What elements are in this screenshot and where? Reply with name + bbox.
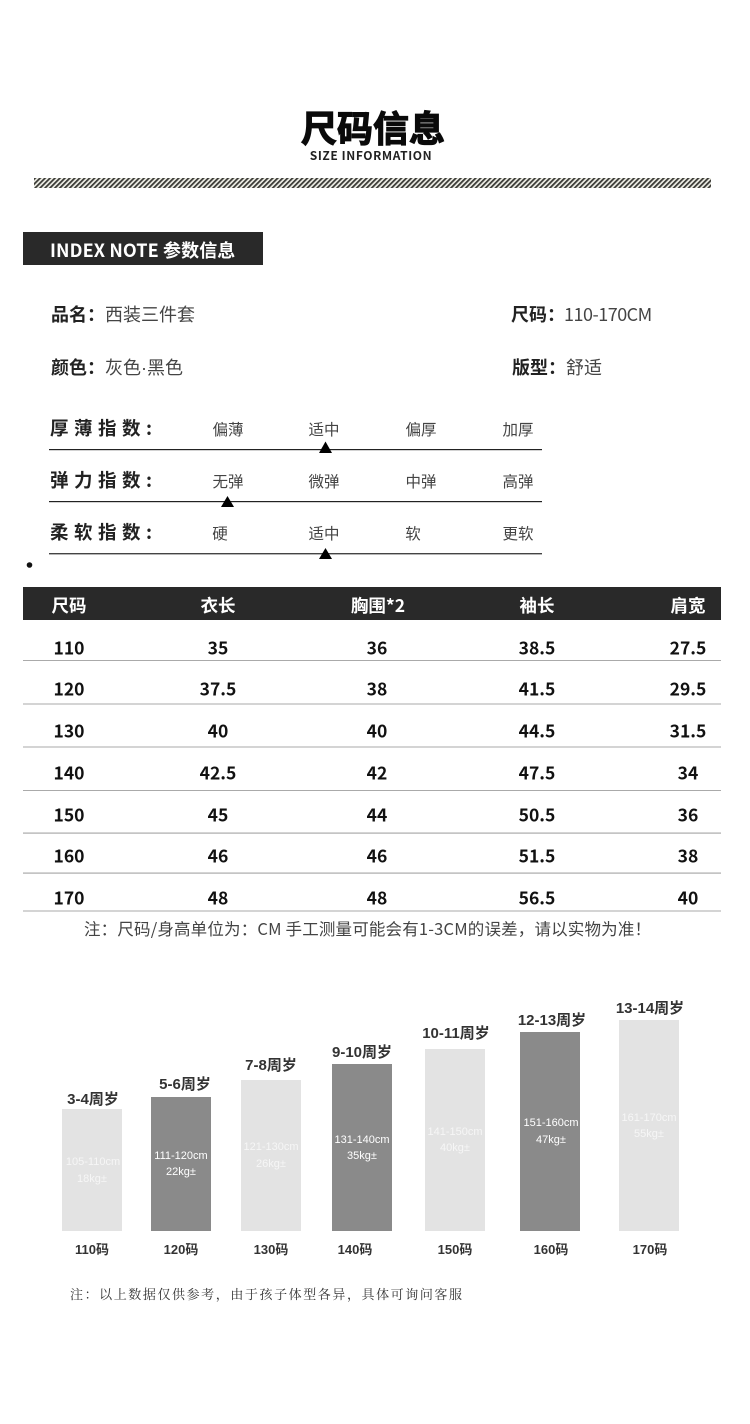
table header: 袖长 — [520, 593, 555, 618]
table header: 衣长 — [200, 593, 236, 618]
title: 尺码信息 — [301, 100, 445, 152]
row 130 — [54, 718, 706, 744]
panel: elasticity index: 高弹 — [502, 470, 534, 492]
bar 110: 110码 — [75, 1242, 109, 1257]
icon: thickness marker — [319, 442, 332, 453]
row 110: 110 — [54, 636, 84, 660]
row 160: 46 — [367, 844, 387, 868]
row 110: 35 — [208, 636, 228, 660]
bar 110: 105-110cm — [66, 1156, 120, 1168]
table header: 尺码 — [52, 593, 86, 618]
chart: age and height bars — [62, 999, 684, 1257]
bar 120: 120码 — [164, 1242, 198, 1257]
icon: elasticity marker — [221, 496, 234, 507]
row 130: 40 — [208, 718, 228, 744]
row 170: 48 — [208, 886, 228, 910]
panel: elasticity index: 中弹 — [405, 470, 437, 492]
panel: softness index: 更软 — [502, 522, 534, 544]
bar 150: 10-11周岁 — [422, 1024, 490, 1042]
text: size range: 110-170CM — [564, 301, 652, 327]
row 170: 40 — [678, 886, 698, 910]
bar 130 — [241, 1056, 301, 1257]
row 160: 160 — [54, 844, 84, 868]
text: product name: 品名： — [51, 301, 105, 327]
bar 170: 161-170cm — [621, 1112, 677, 1124]
text: size range — [511, 301, 652, 327]
row 160 — [54, 844, 698, 868]
table: size chart — [23, 587, 721, 912]
bar 160: 151-160cm — [523, 1117, 579, 1129]
row 120: 41.5 — [519, 676, 555, 702]
row 170: 56.5 — [519, 886, 555, 910]
bar 160: 12-13周岁 — [518, 1011, 586, 1029]
panel: thickness index: 厚薄指数: — [50, 415, 158, 441]
panel: softness index: 柔软指数: — [50, 519, 158, 545]
chart note: 注：以上数据仅供参考，由于孩子体型各异，具体可询问客服 — [70, 1284, 462, 1303]
bar 120 — [151, 1075, 211, 1257]
text: fit: 舒适 — [566, 354, 602, 380]
row 140: 42 — [367, 760, 387, 786]
row 130: 31.5 — [670, 718, 706, 744]
row 150: 36 — [678, 802, 698, 828]
row 150 — [54, 802, 698, 828]
row 120: 29.5 — [670, 676, 706, 702]
text: product name: 西装三件套 — [105, 301, 195, 327]
panel: product info — [51, 301, 652, 380]
text: size range: 尺码： — [511, 301, 565, 327]
table header: 肩宽 — [670, 593, 706, 618]
row 150: 44 — [367, 802, 387, 828]
bar 130: 26kg± — [256, 1158, 286, 1170]
bar 160: 47kg± — [536, 1134, 566, 1146]
row 110: 27.5 — [670, 636, 706, 660]
row 160: 38 — [678, 844, 698, 868]
row 140: 140 — [54, 760, 84, 786]
bar 130: 121-130cm — [243, 1141, 299, 1153]
table header: 胸围*2 — [351, 593, 405, 618]
row 120: 120 — [54, 676, 84, 702]
bar 120: 5-6周岁 — [159, 1075, 211, 1093]
row 130: 44.5 — [519, 718, 555, 744]
row 140: 34 — [678, 760, 698, 786]
bar 110: 18kg± — [77, 1173, 107, 1185]
panel: thickness index: 偏厚 — [405, 418, 437, 440]
row 170: 48 — [367, 886, 387, 910]
bar 170: 170码 — [633, 1242, 667, 1257]
bullet dot — [27, 562, 32, 568]
bar 120: 111-120cm — [154, 1150, 208, 1162]
row 140: 42.5 — [200, 760, 236, 786]
row 130: 40 — [367, 718, 387, 744]
row 120 — [54, 676, 706, 702]
bar 140: 140码 — [338, 1242, 372, 1257]
bar 140: 131-140cm — [334, 1134, 390, 1146]
panel: elasticity index — [49, 467, 542, 507]
row 120: 38 — [367, 676, 387, 702]
bar 110: 3-4周岁 — [67, 1090, 119, 1108]
bar 170: 55kg± — [634, 1128, 664, 1140]
row 150: 50.5 — [519, 802, 555, 828]
row 110: 38.5 — [519, 636, 555, 660]
row 170: 170 — [54, 886, 84, 910]
title: SIZE INFORMATION — [310, 147, 432, 164]
panel: elasticity index: 微弹 — [308, 470, 340, 492]
panel: softness index: 硬 — [212, 522, 228, 544]
bar 140: 35kg± — [347, 1150, 377, 1162]
icon: softness marker — [319, 548, 332, 559]
text: colour — [51, 354, 183, 380]
text: product name — [51, 301, 195, 327]
bar 150: 40kg± — [440, 1142, 470, 1154]
row 160: 51.5 — [519, 844, 555, 868]
bar 150: 150码 — [438, 1242, 472, 1257]
panel: thickness index: 适中 — [308, 418, 340, 440]
text: colour: 颜色： — [51, 354, 105, 380]
bar 130: 7-8周岁 — [245, 1056, 297, 1074]
table note: 注：尺码/身高单位为：CM 手工测量可能会有1-3CM的误差，请以实物为准！ — [84, 916, 651, 940]
bar 140: 9-10周岁 — [332, 1043, 392, 1061]
bar 120: 22kg± — [166, 1166, 196, 1178]
bar 150 — [422, 1024, 490, 1257]
text: colour: 灰色·黑色 — [105, 358, 183, 378]
row 120: 37.5 — [200, 676, 236, 702]
row 130: 130 — [54, 718, 84, 744]
panel: thickness index — [49, 415, 542, 453]
text: fit — [512, 354, 602, 380]
row 170 — [54, 886, 698, 910]
heading: index note: INDEX NOTE 参数信息 — [50, 237, 235, 263]
row 140: 47.5 — [519, 760, 555, 786]
bar 130: 130码 — [254, 1242, 288, 1257]
table header — [23, 587, 721, 620]
row 140 — [54, 760, 698, 786]
panel: softness index: 软 — [405, 522, 421, 544]
bar 150: 141-150cm — [427, 1126, 483, 1138]
row 160: 46 — [208, 844, 228, 868]
bar 160 — [518, 1011, 586, 1257]
bar 170: 13-14周岁 — [616, 999, 684, 1017]
panel: elasticity index: 无弹 — [212, 470, 244, 492]
panel: softness index: 适中 — [308, 522, 340, 544]
row 150: 150 — [54, 802, 84, 828]
panel: softness index — [49, 519, 542, 559]
row 150: 45 — [208, 802, 228, 828]
heading: index note — [23, 232, 263, 265]
bar 110 — [62, 1090, 122, 1257]
bar 140 — [332, 1043, 392, 1257]
panel: elasticity index: 弹力指数: — [50, 467, 158, 493]
text: fit: 版型： — [512, 354, 566, 380]
panel: thickness index: 加厚 — [502, 418, 534, 440]
panel: thickness index: 偏薄 — [212, 418, 244, 440]
row 110: 36 — [367, 636, 387, 660]
bar 170 — [616, 999, 684, 1257]
bar 160: 160码 — [534, 1242, 568, 1257]
row 110 — [54, 636, 706, 660]
